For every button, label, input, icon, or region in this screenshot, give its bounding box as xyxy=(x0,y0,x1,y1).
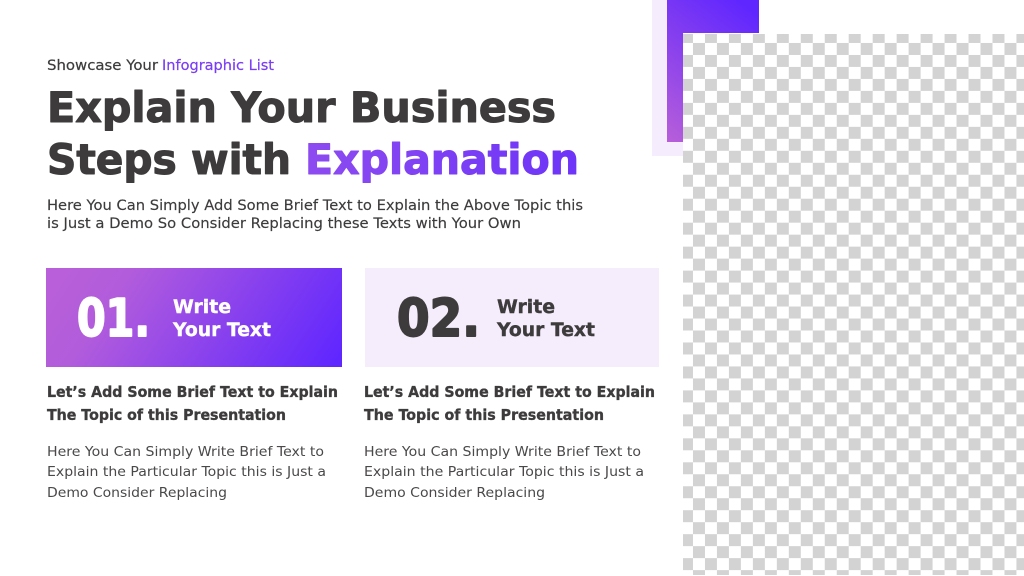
panel: step 01 card xyxy=(46,268,342,367)
column 1 body text: Explain the Particular Topic this is Just a xyxy=(47,464,326,480)
step label 01: Your Text xyxy=(172,319,271,341)
accent: gradient corner frame xyxy=(667,0,759,142)
panel: step 02 card xyxy=(365,268,659,367)
intro text xyxy=(47,198,583,232)
title: Steps with xyxy=(47,135,291,184)
column 1 subheading xyxy=(47,383,338,424)
column 1 body text: Here You Can Simply Write Brief Text to xyxy=(47,444,324,460)
eyebrow heading: Infographic List xyxy=(162,58,275,74)
step label 02: Your Text xyxy=(496,319,595,341)
intro text: is Just a Demo So Consider Replacing these Texts with Your Own xyxy=(47,216,521,232)
eyebrow heading: Showcase Your xyxy=(47,58,158,74)
image placeholder: transparency checkerboard xyxy=(683,34,1024,575)
column 1 body text: Demo Consider Replacing xyxy=(47,485,227,501)
step label 01: Write xyxy=(173,296,231,318)
eyebrow heading xyxy=(47,58,275,74)
column 2 subheading: Let’s Add Some Brief Text to Explain xyxy=(364,383,655,401)
column 2 body text: Explain the Particular Topic this is Just a xyxy=(364,464,644,480)
column 1 subheading: The Topic of this Presentation xyxy=(47,406,286,424)
title: Explain Your Business xyxy=(47,83,556,132)
intro text: Here You Can Simply Add Some Brief Text to Explain the Above Topic this xyxy=(47,198,583,214)
step label 01 xyxy=(172,296,271,341)
step label 02: Write xyxy=(497,296,555,318)
column 2 body text: Demo Consider Replacing xyxy=(364,485,545,501)
accent: pale backing block xyxy=(652,0,683,156)
step number 02: 02. xyxy=(397,289,480,349)
column 2 body text: Here You Can Simply Write Brief Text to xyxy=(364,444,641,460)
step number 01: 01. xyxy=(77,289,150,349)
step label 02 xyxy=(496,296,595,341)
column 2 subheading xyxy=(364,383,655,424)
column 2 body text xyxy=(364,444,644,501)
title: Explanation xyxy=(305,135,579,184)
column 2 subheading: The Topic of this Presentation xyxy=(364,406,604,424)
column 1 subheading: Let’s Add Some Brief Text to Explain xyxy=(47,383,338,401)
title xyxy=(47,83,579,184)
column 1 body text xyxy=(47,444,326,501)
